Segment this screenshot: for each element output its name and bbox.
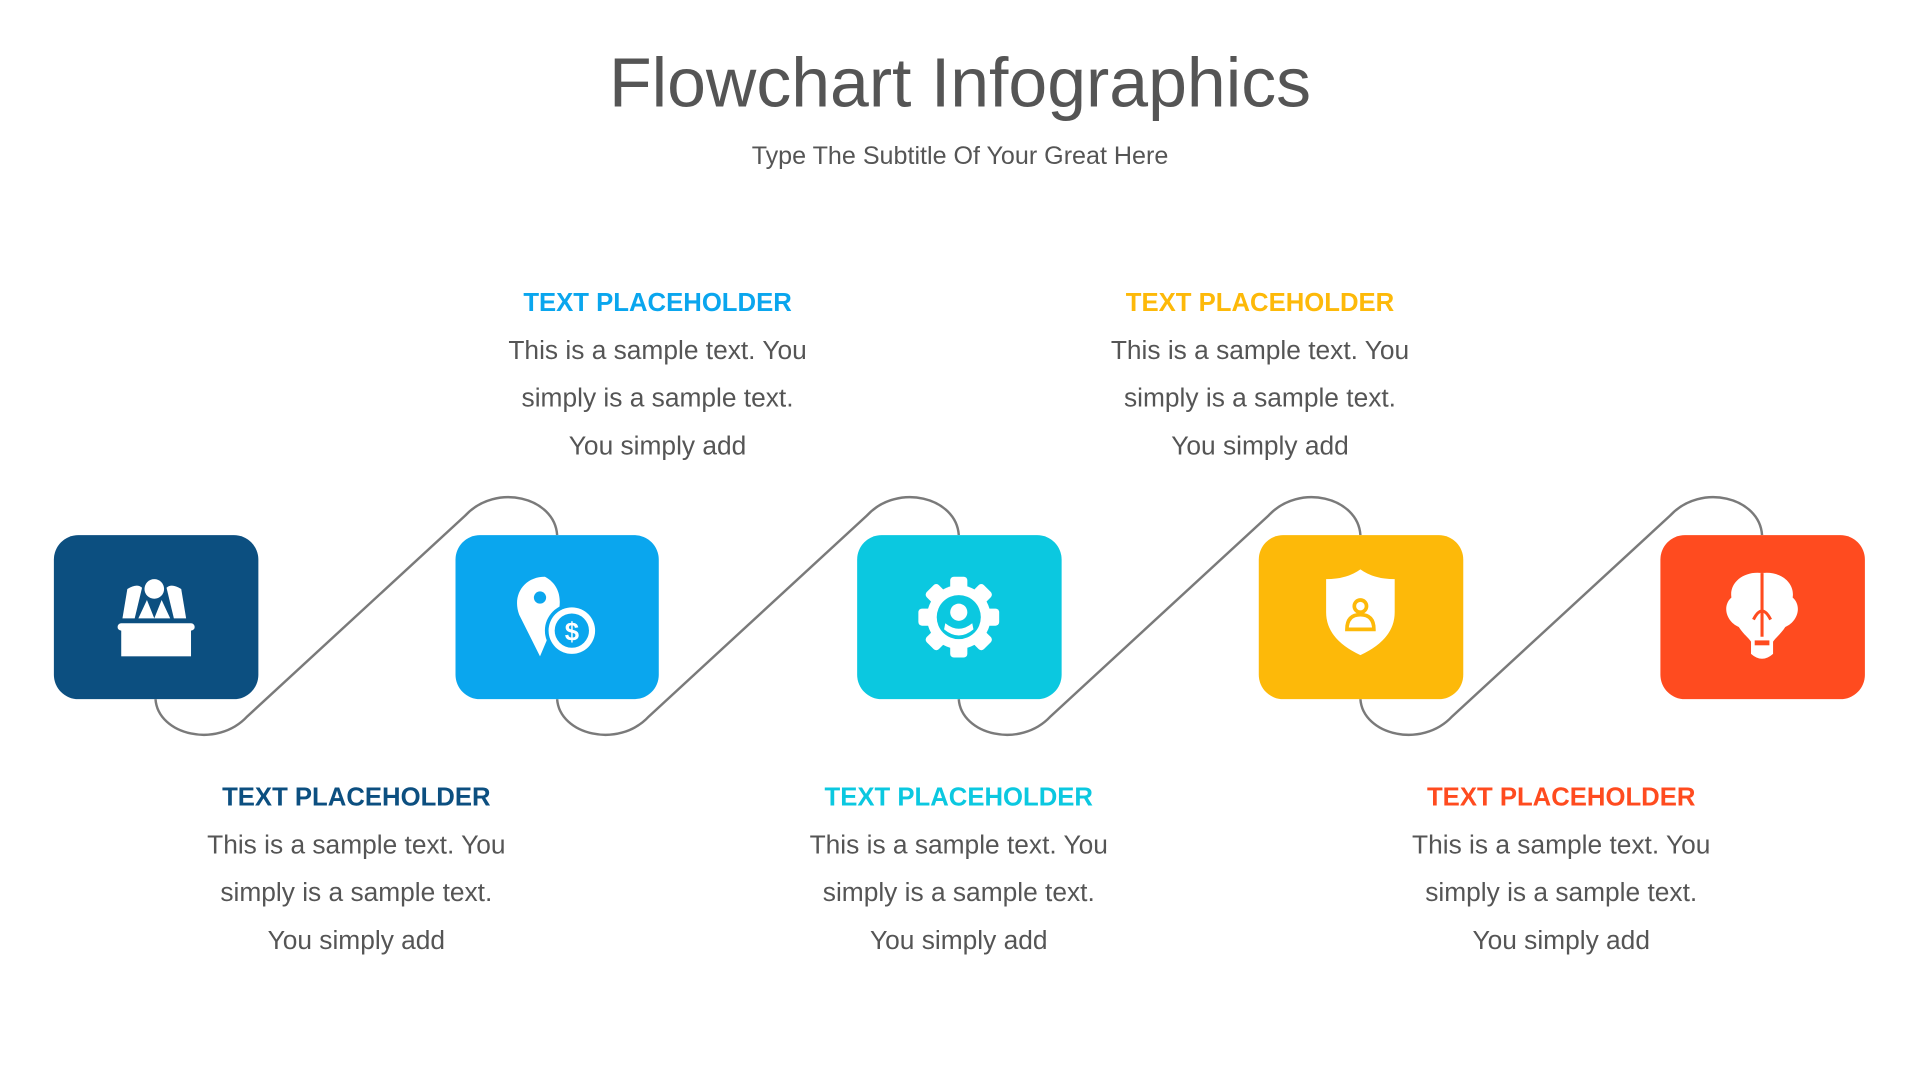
- text block 4 (top): simply is a sample text.: [1124, 383, 1396, 413]
- step 4 box: shield with user: [1259, 535, 1463, 699]
- text block 3 (bottom): [810, 784, 1108, 955]
- text block 4 (top): TEXT PLACEHOLDER: [1126, 289, 1395, 317]
- text block 5 (bottom): TEXT PLACEHOLDER: [1427, 784, 1696, 812]
- text block 2 (top): TEXT PLACEHOLDER: [523, 289, 792, 317]
- text block 2 (top): This is a sample text. You: [508, 335, 807, 365]
- connector lines: [156, 497, 1762, 735]
- text block 4 (top): This is a sample text. You: [1111, 335, 1409, 365]
- step 5 box: brain bulb: [1660, 535, 1865, 699]
- title: Flowchart Infographics: [609, 44, 1311, 122]
- text block 4 (top): You simply add: [1171, 430, 1349, 460]
- step 1 box: podium: [54, 535, 258, 699]
- text block 2 (top): You simply add: [569, 430, 746, 460]
- text block 3 (bottom): This is a sample text. You: [810, 829, 1108, 859]
- text block 5 (bottom): You simply add: [1472, 925, 1650, 955]
- text block 1 (bottom): TEXT PLACEHOLDER: [222, 784, 491, 812]
- text block 1 (bottom): This is a sample text. You: [207, 829, 506, 859]
- text block 3 (bottom): You simply add: [870, 925, 1048, 955]
- step 3 box: gear with person: [857, 535, 1062, 699]
- text block 5 (bottom): [1412, 784, 1710, 955]
- step 2 box: location with dollar: [456, 535, 659, 699]
- text block 3 (bottom): TEXT PLACEHOLDER: [825, 784, 1093, 812]
- text block 5 (bottom): simply is a sample text.: [1425, 877, 1697, 907]
- text block 5 (bottom): This is a sample text. You: [1412, 829, 1710, 859]
- text block 4 (top): [1111, 289, 1409, 460]
- text block 3 (bottom): simply is a sample text.: [823, 877, 1095, 907]
- text block 2 (top): simply is a sample text.: [522, 383, 794, 413]
- text block 2 (top): [508, 289, 807, 460]
- text block 1 (bottom): simply is a sample text.: [220, 877, 492, 907]
- text block 1 (bottom): [207, 784, 506, 955]
- step 2 box: location with dollar: $: [565, 618, 579, 646]
- text block 1 (bottom): You simply add: [268, 925, 445, 955]
- subtitle: Type The Subtitle Of Your Great Here: [752, 142, 1168, 170]
